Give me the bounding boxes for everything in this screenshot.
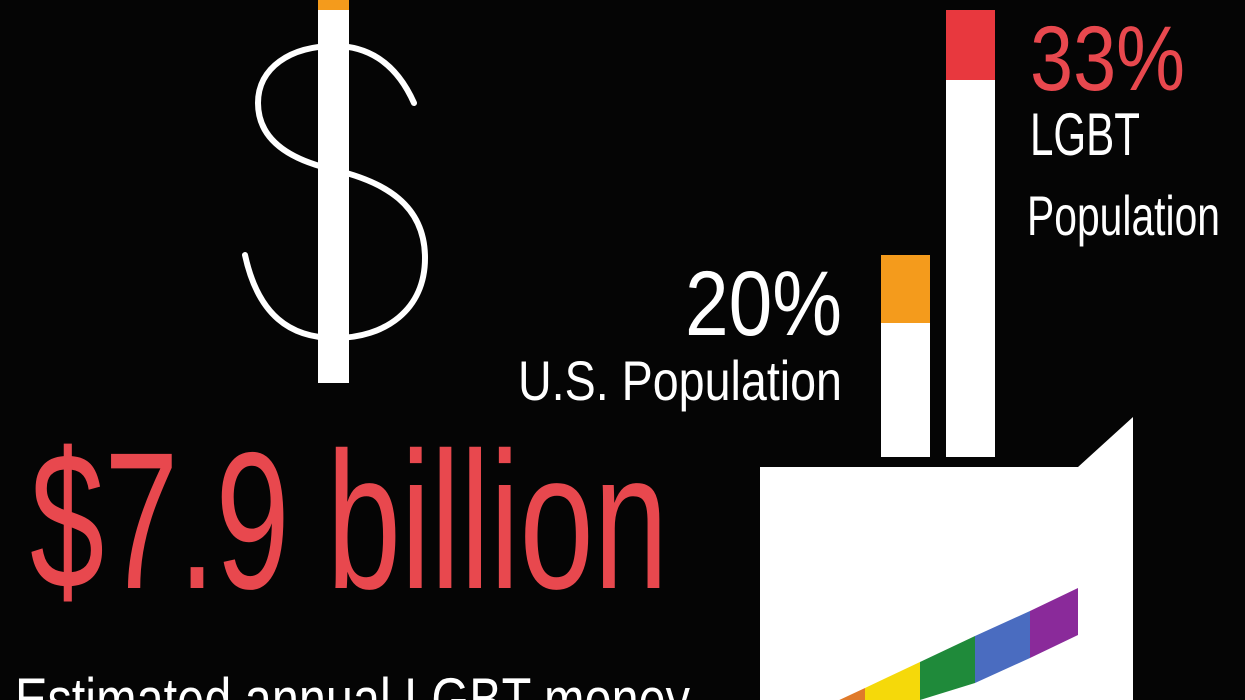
label: 20% U.S. Population: 20%	[685, 253, 842, 355]
label: 33% LGBT Population: LGBT	[1030, 101, 1140, 168]
label: 33% LGBT Population	[1027, 8, 1220, 247]
bar: LGBT population 33%	[946, 10, 995, 457]
icon: cigarette dollar sign	[245, 0, 425, 383]
bar: US population 20%	[881, 255, 930, 457]
bar chart: population share	[881, 10, 995, 457]
label: 20% U.S. Population	[518, 253, 842, 412]
heading: $7.9 billion: $7.9 billion	[30, 412, 668, 630]
icon: cigarette pack with rainbow band	[760, 417, 1133, 700]
label: 20% U.S. Population: U.S. Population	[518, 349, 842, 412]
label: 33% LGBT Population: 33%	[1030, 8, 1185, 110]
